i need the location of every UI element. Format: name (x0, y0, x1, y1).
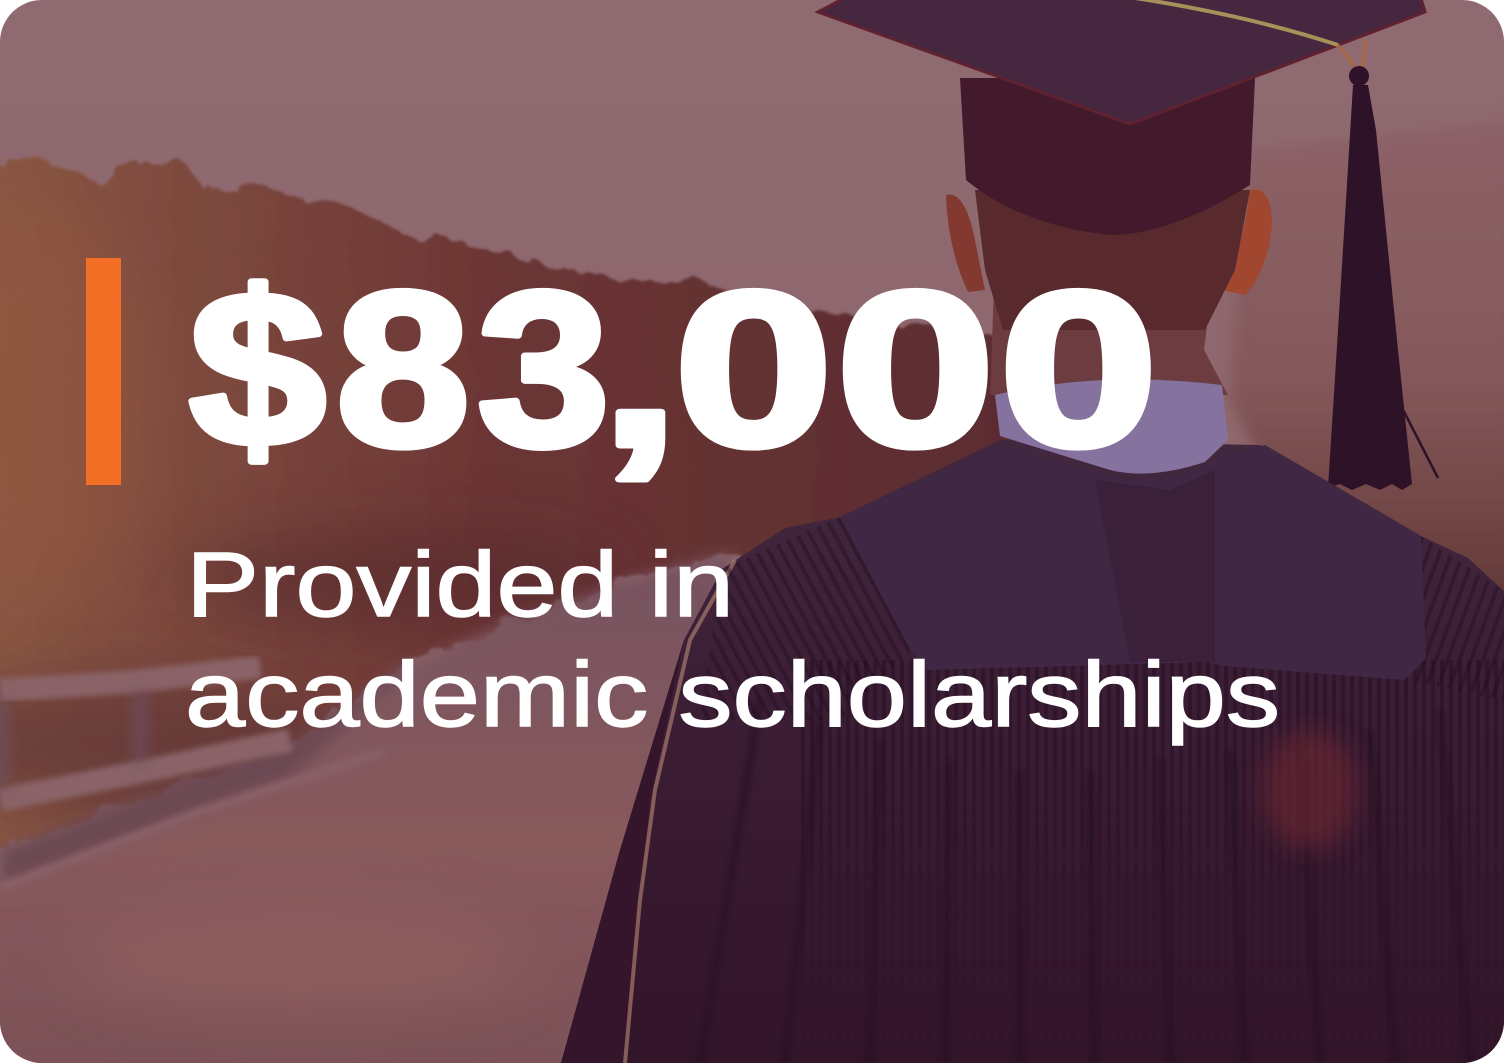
road edge line (0, 752, 383, 888)
robe (561, 440, 1504, 1063)
tassel knot (1349, 66, 1369, 86)
tassel (1328, 85, 1412, 490)
orange accent bar (86, 258, 121, 485)
right sleeve pleats (1417, 536, 1504, 700)
graduate (561, 0, 1504, 1063)
fine gathered pleats (801, 660, 1504, 792)
right hillside (1228, 130, 1504, 591)
headline figure: 0 (674, 246, 833, 492)
caption line 1: Provided in (186, 534, 734, 636)
tassel cords (1338, 40, 1366, 70)
headline figure: $ (189, 246, 326, 492)
collar (995, 379, 1228, 474)
caption (185, 534, 1280, 746)
distant hills (0, 158, 1020, 860)
broad folds (700, 700, 1470, 1063)
caption line 2: academic scholarships (185, 644, 1280, 746)
rail posts (2, 690, 140, 790)
hood (840, 445, 1426, 680)
headline figure: 0 (999, 246, 1158, 492)
lower guard rail (0, 740, 290, 800)
headline figure: 8 (336, 246, 470, 492)
cap band (960, 78, 1255, 235)
dark hollow above road (180, 530, 620, 630)
road light patch (132, 935, 468, 996)
hair (975, 190, 1250, 330)
left ear (946, 195, 985, 292)
headline figure: 3 (477, 246, 610, 492)
dark lower hillside (0, 675, 340, 815)
neck (990, 298, 1228, 395)
road shoulder (0, 664, 402, 882)
lens flare (1262, 730, 1358, 850)
upper guard rail (0, 667, 260, 690)
left sleeve pleats (700, 517, 911, 720)
right ear (1222, 189, 1272, 295)
road (0, 552, 735, 1063)
robe edge highlight (625, 560, 735, 1063)
mortarboard (818, 0, 1425, 124)
robe sleeve shadow left (561, 640, 684, 1063)
headline figure: 0 (836, 246, 995, 492)
gold cord (1135, 0, 1338, 45)
pleats (700, 517, 1504, 1063)
headline figure: , (600, 246, 680, 492)
hood centre panel (1095, 470, 1215, 662)
tassel stray thread (1404, 409, 1439, 478)
warm glow on hills (0, 210, 150, 590)
